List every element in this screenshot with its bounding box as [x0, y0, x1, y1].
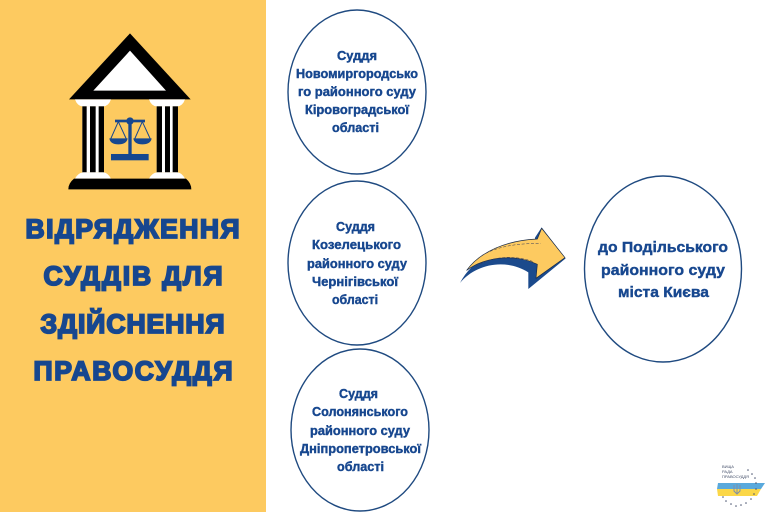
- panel: judge of Kozelets court: області: [332, 293, 378, 307]
- icon: curved arrow: [460, 227, 566, 289]
- panel: judge of Solone court: області: [337, 460, 384, 474]
- panel: destination Podilskyi court: районного суду: [601, 262, 726, 279]
- panel: judge of Novomyrhorod court: Кіровоградської: [305, 103, 409, 117]
- panel: judge of Kozelets court: районного суду: [307, 257, 407, 271]
- logo: High Council of Justice: ПРАВОСУДДЯ: [722, 474, 749, 479]
- panel: judge of Kozelets court: Чернігівської: [312, 275, 399, 289]
- logo: High Council of Justice: РАДА: [722, 469, 733, 474]
- title: [26, 214, 240, 386]
- logo: High Council of Justice: [717, 464, 765, 507]
- panel: judge of Novomyrhorod court: Новомиргородсько: [296, 67, 418, 81]
- panel: judge of Solone court: Дніпропетровської: [300, 442, 421, 456]
- panel: destination Podilskyi court: до Подільського: [598, 239, 728, 256]
- panel: judge of Novomyrhorod court: області: [332, 121, 379, 135]
- panel: judge of Kozelets court: [288, 181, 426, 345]
- icon: courthouse with scales: [68, 33, 191, 189]
- panel: judge of Novomyrhorod court: Суддя: [337, 49, 377, 63]
- panel: yellow sidebar: [0, 0, 266, 512]
- panel: judge of Solone court: Солонянського: [312, 405, 408, 419]
- panel: judge of Novomyrhorod court: го районного суду: [298, 85, 416, 99]
- logo: High Council of Justice: ВИЩА: [722, 464, 734, 469]
- title: ЗДІЙСНЕННЯ: [40, 309, 224, 339]
- panel: judge of Kozelets court: Козелецького: [312, 238, 401, 252]
- title: ПРАВОСУДДЯ: [34, 356, 232, 386]
- panel: destination Podilskyi court: міста Києва: [618, 284, 710, 301]
- panel: judge of Kozelets court: Суддя: [336, 220, 375, 234]
- panel: destination Podilskyi court: [584, 176, 742, 362]
- title: ВІДРЯДЖЕННЯ: [26, 214, 240, 244]
- title: СУДДІВ ДЛЯ: [44, 261, 222, 291]
- panel: judge of Solone court: Суддя: [339, 387, 378, 401]
- panel: judge of Novomyrhorod court: [288, 10, 426, 174]
- panel: judge of Solone court: [291, 349, 429, 511]
- panel: judge of Solone court: районного суду: [310, 424, 410, 438]
